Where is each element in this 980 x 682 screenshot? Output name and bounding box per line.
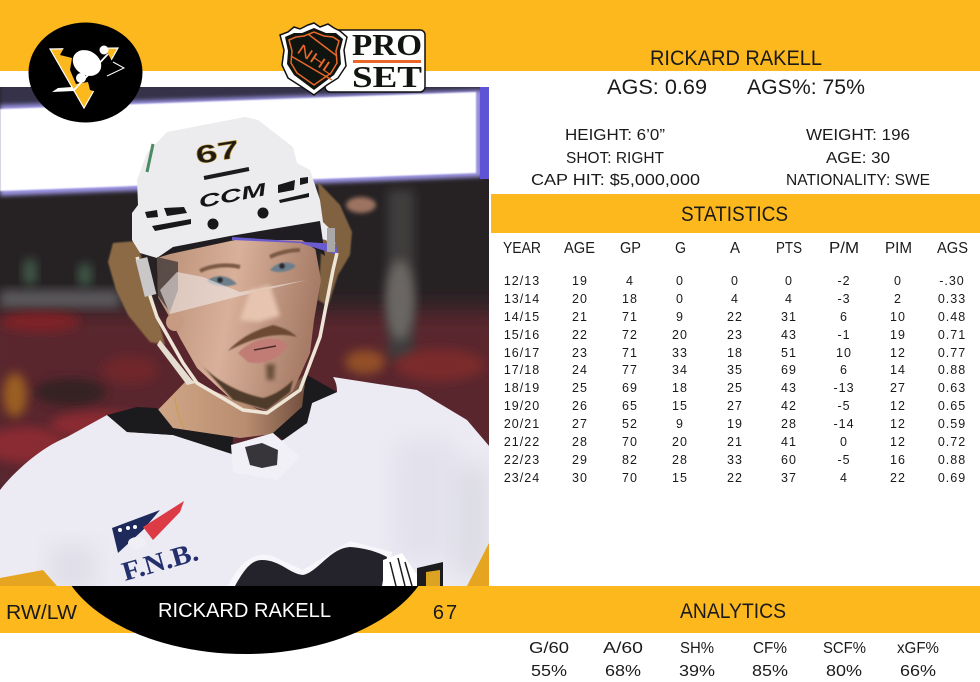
statistics table bbox=[503, 240, 968, 485]
season 20/21: 20/21 bbox=[504, 417, 540, 431]
season 21/22: 28 bbox=[572, 435, 588, 449]
table header: YEAR bbox=[503, 240, 541, 257]
season 21/22: 0.72 bbox=[938, 435, 966, 449]
season 18/19: 27 bbox=[890, 381, 906, 395]
season 21/22: 70 bbox=[622, 435, 638, 449]
season 17/18: 17/18 bbox=[504, 363, 540, 377]
season 12/13: -2 bbox=[837, 274, 851, 288]
season 14/15: 21 bbox=[572, 310, 588, 324]
analytics values: SCF% bbox=[823, 640, 866, 657]
shield letters NHL: NHL bbox=[294, 41, 338, 79]
player bio left: CAP HIT: $5,000,000 bbox=[531, 172, 700, 189]
season 20/21: 9 bbox=[676, 417, 684, 431]
season 21/22: 12 bbox=[890, 435, 906, 449]
season 16/17: 0.77 bbox=[938, 346, 966, 360]
necklace bbox=[175, 397, 184, 428]
season 17/18: 14 bbox=[890, 363, 906, 377]
NHL Pro Set logo bbox=[280, 23, 425, 95]
chin strap bbox=[137, 253, 337, 413]
season 15/16: 72 bbox=[622, 328, 638, 342]
season 17/18: 24 bbox=[572, 363, 588, 377]
season 12/13: -.30 bbox=[939, 274, 965, 288]
player name on plate: RICKARD RAKELL bbox=[158, 600, 331, 622]
jersey collar left bbox=[107, 407, 233, 454]
season 12/13 bbox=[504, 274, 965, 288]
season 12/13: 0 bbox=[785, 274, 793, 288]
statistics banner bbox=[491, 194, 980, 233]
season 12/13: 0 bbox=[676, 274, 684, 288]
hockey stick bbox=[52, 46, 108, 92]
season 16/17: 51 bbox=[781, 346, 797, 360]
season 13/14: 4 bbox=[731, 292, 739, 306]
player photo bbox=[0, 85, 510, 590]
penguin body bbox=[60, 38, 123, 92]
season 23/24: 0.69 bbox=[938, 471, 966, 485]
jersey sponsor patch FNB: F.N.B. bbox=[118, 536, 202, 587]
season 13/14: -3 bbox=[837, 292, 851, 306]
season 22/23: -5 bbox=[837, 453, 851, 467]
season 16/17: 23 bbox=[572, 346, 588, 360]
nose bbox=[240, 285, 280, 322]
visor clips bbox=[136, 228, 335, 385]
season 12/13: 0 bbox=[894, 274, 902, 288]
face bbox=[157, 236, 321, 411]
season 20/21: -14 bbox=[833, 417, 855, 431]
table header: A bbox=[730, 240, 740, 257]
analytics values: SH% bbox=[680, 640, 714, 657]
jersey collar right bbox=[273, 375, 337, 440]
season 14/15: 71 bbox=[622, 310, 638, 324]
logo triangle bbox=[50, 48, 118, 108]
season 19/20 bbox=[504, 399, 966, 413]
table header: G bbox=[675, 240, 686, 257]
season 17/18: 34 bbox=[672, 363, 688, 377]
AGS summary bbox=[607, 76, 865, 99]
analytics values: CF% bbox=[753, 640, 787, 657]
season 23/24 bbox=[504, 471, 966, 485]
season 16/17: 16/17 bbox=[504, 346, 540, 360]
jersey penguin crest bbox=[228, 541, 443, 586]
season 17/18: 69 bbox=[781, 363, 797, 377]
analytics values: A/60 bbox=[603, 640, 643, 657]
arena light band bbox=[0, 85, 489, 196]
analytics values: 66% bbox=[900, 663, 936, 680]
season 15/16: 20 bbox=[672, 328, 688, 342]
season 14/15: 6 bbox=[840, 310, 848, 324]
season 13/14: 13/14 bbox=[504, 292, 540, 306]
season 20/21: 0.59 bbox=[938, 417, 966, 431]
black name plate bbox=[72, 586, 418, 654]
season 17/18: 35 bbox=[727, 363, 743, 377]
season 18/19: 69 bbox=[622, 381, 638, 395]
season 16/17: 71 bbox=[622, 346, 638, 360]
season 13/14: 18 bbox=[622, 292, 638, 306]
table header: GP bbox=[620, 240, 641, 257]
season 22/23: 29 bbox=[572, 453, 588, 467]
helmet opening bbox=[157, 221, 325, 258]
season 17/18: 77 bbox=[622, 363, 638, 377]
jersey NHL crest bbox=[245, 443, 278, 468]
season 20/21: 19 bbox=[727, 417, 743, 431]
season 19/20: 42 bbox=[781, 399, 797, 413]
season 23/24: 70 bbox=[622, 471, 638, 485]
season 21/22: 41 bbox=[781, 435, 797, 449]
eyes bbox=[200, 250, 300, 286]
analytics values: 68% bbox=[605, 663, 641, 680]
season 20/21: 12 bbox=[890, 417, 906, 431]
collar tab bbox=[231, 433, 282, 454]
season 16/17: 12 bbox=[890, 346, 906, 360]
table header: P/M bbox=[829, 240, 859, 257]
season 20/21: 27 bbox=[572, 417, 588, 431]
season 22/23: 28 bbox=[672, 453, 688, 467]
season 13/14: 4 bbox=[785, 292, 793, 306]
top yellow banner bbox=[0, 0, 980, 71]
season 14/15 bbox=[504, 310, 966, 324]
analytics values: 85% bbox=[752, 663, 788, 680]
player bio left: SHOT: RIGHT bbox=[566, 150, 664, 167]
season 13/14: 2 bbox=[894, 292, 902, 306]
mouth bbox=[238, 338, 288, 363]
season 22/23: 33 bbox=[727, 453, 743, 467]
season 18/19: 18/19 bbox=[504, 381, 540, 395]
season 16/17: 18 bbox=[727, 346, 743, 360]
season 20/21: 28 bbox=[781, 417, 797, 431]
season 23/24: 37 bbox=[781, 471, 797, 485]
season 14/15: 10 bbox=[890, 310, 906, 324]
season 12/13: 0 bbox=[731, 274, 739, 288]
season 12/13: 19 bbox=[572, 274, 588, 288]
season 17/18: 6 bbox=[840, 363, 848, 377]
season 14/15: 0.48 bbox=[938, 310, 966, 324]
season 18/19: 25 bbox=[727, 381, 743, 395]
logo word PRO: PRO bbox=[352, 27, 422, 62]
season 17/18 bbox=[504, 363, 966, 377]
helmet bbox=[132, 117, 338, 258]
season 13/14: 0 bbox=[676, 292, 684, 306]
analytics heading: ANALYTICS bbox=[680, 600, 786, 623]
season 13/14: 0.33 bbox=[938, 292, 966, 306]
season 18/19: 25 bbox=[572, 381, 588, 395]
season 15/16: -1 bbox=[837, 328, 851, 342]
top name heading: RICKARD RAKELL bbox=[650, 47, 822, 70]
season 23/24: 15 bbox=[672, 471, 688, 485]
season 19/20: 15 bbox=[672, 399, 688, 413]
season 21/22: 21/22 bbox=[504, 435, 540, 449]
helmet number 67: 67 bbox=[194, 135, 241, 170]
logo word SET: SET bbox=[352, 59, 422, 94]
season 18/19: 18 bbox=[672, 381, 688, 395]
logo plate bbox=[325, 30, 425, 92]
season 22/23: 16 bbox=[890, 453, 906, 467]
table header: PIM bbox=[885, 240, 912, 257]
season 15/16: 15/16 bbox=[504, 328, 540, 342]
season 21/22: 0 bbox=[840, 435, 848, 449]
season 20/21 bbox=[504, 417, 966, 431]
season 23/24: 30 bbox=[572, 471, 588, 485]
season 14/15: 22 bbox=[727, 310, 743, 324]
bottom yellow banner bbox=[0, 586, 980, 633]
beard bbox=[197, 360, 293, 410]
AGS summary: AGS: 0.69 bbox=[607, 76, 707, 99]
season 18/19 bbox=[504, 381, 966, 395]
season 23/24: 22 bbox=[727, 471, 743, 485]
season 23/24: 4 bbox=[840, 471, 848, 485]
season 23/24: 23/24 bbox=[504, 471, 540, 485]
season 14/15: 9 bbox=[676, 310, 684, 324]
player bio right bbox=[786, 127, 930, 189]
season 22/23: 0.88 bbox=[938, 453, 966, 467]
season 21/22: 21 bbox=[727, 435, 743, 449]
season 15/16: 19 bbox=[890, 328, 906, 342]
season 17/18: 0.88 bbox=[938, 363, 966, 377]
season 14/15: 31 bbox=[781, 310, 797, 324]
season 12/13: 12/13 bbox=[504, 274, 540, 288]
season 22/23: 82 bbox=[622, 453, 638, 467]
season 22/23: 60 bbox=[781, 453, 797, 467]
position label: RW/LW bbox=[6, 602, 77, 624]
season 19/20: -5 bbox=[837, 399, 851, 413]
season 13/14: 20 bbox=[572, 292, 588, 306]
season 14/15: 14/15 bbox=[504, 310, 540, 324]
player bio left bbox=[531, 127, 700, 189]
analytics values: 80% bbox=[826, 663, 862, 680]
season 15/16: 22 bbox=[572, 328, 588, 342]
season 18/19: 0.63 bbox=[938, 381, 966, 395]
season 19/20: 19/20 bbox=[504, 399, 540, 413]
season 18/19: 43 bbox=[781, 381, 797, 395]
season 16/17 bbox=[504, 346, 966, 360]
player bio right: WEIGHT: 196 bbox=[806, 127, 910, 144]
season 22/23: 22/23 bbox=[504, 453, 540, 467]
player bio left: HEIGHT: 6’0” bbox=[565, 127, 665, 144]
player bio right: AGE: 30 bbox=[826, 150, 890, 167]
season 15/16: 43 bbox=[781, 328, 797, 342]
statistics heading: STATISTICS bbox=[681, 203, 788, 226]
neck bbox=[153, 372, 307, 438]
season 12/13: 4 bbox=[626, 274, 634, 288]
jersey sleeve yellow trim bbox=[0, 543, 489, 586]
penguin belly bbox=[68, 45, 106, 81]
NHL shield bbox=[280, 23, 347, 95]
season 19/20: 65 bbox=[622, 399, 638, 413]
season 19/20: 12 bbox=[890, 399, 906, 413]
season 20/21: 52 bbox=[622, 417, 638, 431]
season 23/24: 22 bbox=[890, 471, 906, 485]
arena background bbox=[0, 87, 489, 490]
jersey sponsor patch FNB bbox=[112, 501, 202, 587]
logo disc bbox=[28, 22, 142, 122]
visor shade bbox=[157, 257, 178, 312]
table header: PTS bbox=[776, 240, 802, 257]
team logo penguin bbox=[28, 22, 142, 122]
season 21/22 bbox=[504, 435, 966, 449]
analytics values: G/60 bbox=[529, 640, 569, 657]
jersey bbox=[0, 375, 490, 590]
season 21/22: 20 bbox=[672, 435, 688, 449]
analytics values: 39% bbox=[679, 663, 715, 680]
season 18/19: -13 bbox=[833, 381, 855, 395]
season 16/17: 33 bbox=[672, 346, 688, 360]
analytics values: xGF% bbox=[897, 640, 939, 657]
table header: AGE bbox=[564, 240, 595, 257]
ear bbox=[166, 316, 176, 331]
table header bbox=[503, 240, 968, 257]
analytics values: 55% bbox=[531, 663, 567, 680]
season 19/20: 26 bbox=[572, 399, 588, 413]
helmet CCM brand: CCM bbox=[197, 179, 269, 212]
penguin flipper outline bbox=[107, 62, 124, 76]
player bio right: NATIONALITY: SWE bbox=[786, 172, 930, 189]
hair bbox=[108, 182, 352, 345]
season 19/20: 27 bbox=[727, 399, 743, 413]
visor glare bbox=[160, 272, 307, 314]
season 15/16 bbox=[504, 328, 966, 342]
moustache bbox=[228, 325, 297, 351]
AGS summary: AGS%: 75% bbox=[747, 76, 865, 99]
season 15/16: 23 bbox=[727, 328, 743, 342]
season 19/20: 0.65 bbox=[938, 399, 966, 413]
jersey number: 67 bbox=[433, 602, 459, 624]
season 15/16: 0.71 bbox=[938, 328, 966, 342]
season 13/14 bbox=[504, 292, 966, 306]
season 22/23 bbox=[504, 453, 966, 467]
season 16/17: 10 bbox=[836, 346, 852, 360]
table header: AGS bbox=[937, 240, 968, 257]
analytics values bbox=[529, 640, 939, 680]
